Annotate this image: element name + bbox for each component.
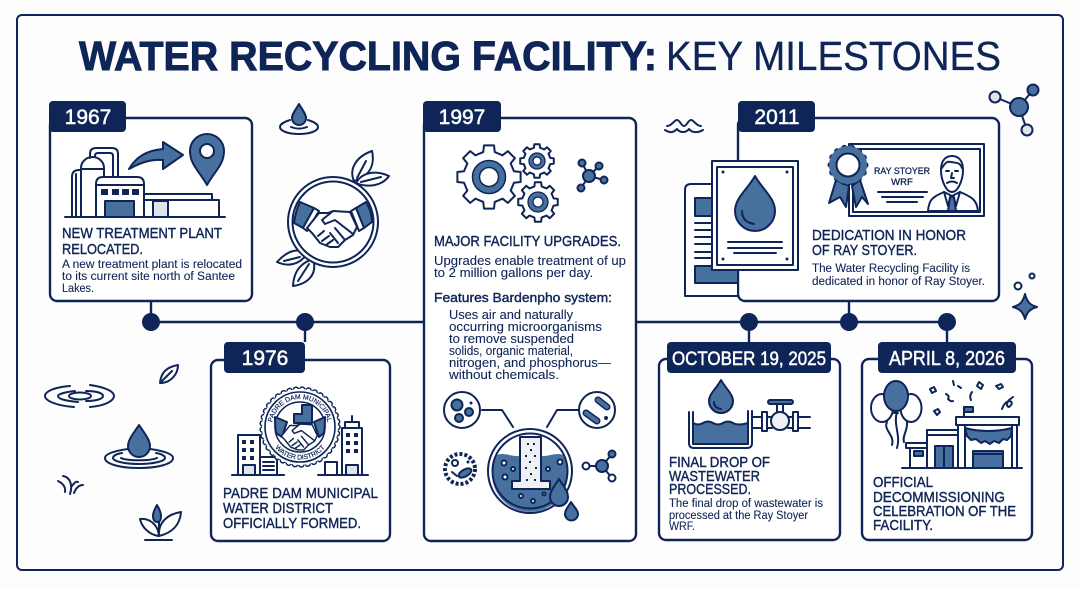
portrait <box>928 156 978 211</box>
heading October: FINAL DROP OF <box>669 454 770 471</box>
heading 2011: OF RAY STOYER. <box>812 242 917 259</box>
heading 2011 <box>812 227 966 259</box>
subheading: Bardenpho: Features Bardenpho system: <box>434 290 612 305</box>
text: capacity: to 2 million gallons per day. <box>434 265 593 280</box>
icon: ripple <box>45 385 114 407</box>
text: Bardenpho description: solids, organic material, <box>449 343 573 358</box>
year tag 2011: 2011 <box>754 106 800 129</box>
timeline <box>142 301 956 342</box>
icon: gears <box>457 144 558 222</box>
icon: drop with ripple <box>280 104 318 134</box>
panel: 1997 <box>423 101 636 541</box>
text: Bardenpho description: without chemicals. <box>448 367 559 382</box>
year tag 1997 <box>423 101 501 132</box>
panel: 2011 <box>685 101 999 301</box>
text 1967: A new treatment plant is relocated <box>62 257 242 271</box>
heading 1976: WATER DISTRICT <box>223 500 333 517</box>
heading 1997: MAJOR FACILITY UPGRADES. <box>434 233 621 250</box>
decorative icons: ripples, drop, leaves <box>45 365 181 540</box>
year tag 1976: 1976 <box>242 347 288 370</box>
icon: drops <box>550 479 578 520</box>
title: KEY MILESTONES <box>666 33 1001 79</box>
certificate text <box>874 166 930 188</box>
rosette <box>829 148 868 207</box>
certificate text: WRF <box>891 177 913 188</box>
date tag October: OCTOBER 19, 2025 <box>672 349 826 370</box>
text: capacity: Upgrades enable treatment of up <box>434 253 626 268</box>
heading 1976 <box>223 485 378 532</box>
icon: leaf <box>160 365 178 383</box>
icon: filter tank <box>488 429 572 513</box>
heading April: FACILITY. <box>873 517 933 534</box>
text October <box>669 496 823 533</box>
year tag 2011 <box>738 101 815 132</box>
panel: 1967 <box>49 101 252 301</box>
text 2011: The Water Recycling Facility is <box>812 261 970 275</box>
text: Bardenpho description: nitrogen, and phosphorus— <box>449 355 611 370</box>
icon: molecule lower <box>582 450 616 482</box>
year tag 1967: 1967 <box>65 106 111 129</box>
heading April: CELEBRATION OF THE <box>873 503 1016 520</box>
year tag 1967 <box>49 101 126 132</box>
icon: bacteria circle <box>547 392 615 428</box>
icon: certificate <box>829 144 984 216</box>
text October: processed at the Ray Stoyer <box>669 508 808 522</box>
icon: grass <box>58 476 83 494</box>
icon: molecule small <box>578 160 608 192</box>
panel: 1976 <box>210 342 392 542</box>
icon: district seal: PADRE DAM MUNICIPAL <box>268 394 332 422</box>
icon: city buildings <box>232 416 368 475</box>
text October: WRF. <box>669 519 695 533</box>
heading 1976: OFFICIALLY FORMED. <box>223 515 361 532</box>
panel: April 8, 2026 <box>862 342 1032 540</box>
text: Bardenpho description <box>448 307 611 382</box>
heading April: OFFICIAL <box>873 474 933 491</box>
heading 2011: DEDICATION IN HONOR <box>812 227 966 244</box>
text 2011 <box>812 261 985 288</box>
heading October: WASTEWATER <box>669 468 760 485</box>
icon: balloons <box>871 381 922 448</box>
icon: back document <box>685 184 738 296</box>
text October: The final drop of wastewater is <box>669 496 823 510</box>
date tag April <box>878 342 1016 373</box>
icon: falling drop <box>709 380 733 413</box>
title: WATER RECYCLING FACILITY: <box>79 33 657 79</box>
year tag 1997: 1997 <box>439 106 485 129</box>
heading 1976: PADRE DAM MUNICIPAL <box>223 485 378 502</box>
text 1967: to its current site north of Santee <box>62 269 235 283</box>
heading October: PROCESSED. <box>669 481 751 498</box>
heading 1967: RELOCATED. <box>62 241 143 258</box>
heading October <box>669 454 770 498</box>
heading April <box>873 474 1016 534</box>
icon: location pin <box>190 134 224 185</box>
text: Bardenpho description: Uses air and naturally <box>449 307 573 322</box>
text 1967 <box>62 257 242 295</box>
icon: treatment plant <box>65 148 225 217</box>
icon: facility building <box>902 407 1022 468</box>
certificate text: RAY STOYER <box>874 166 930 177</box>
year tag 1976 <box>224 342 305 373</box>
icon: solids circle <box>444 392 513 428</box>
icon: district seal: WATER DISTRICT <box>276 444 324 460</box>
text: Bardenpho description: occurring microorganisms <box>449 319 603 334</box>
text: Bardenpho description: to remove suspended <box>449 331 574 346</box>
icon: microbe <box>445 454 475 484</box>
panel: October 19, 2025 <box>659 342 840 540</box>
heading 1967: NEW TREATMENT PLANT <box>62 225 222 242</box>
heading April: DECOMMISSIONING <box>873 489 1005 506</box>
icon: confetti <box>930 381 1013 415</box>
text 2011: dedicated in honor of Ray Stoyer. <box>812 274 985 288</box>
icon: sprout <box>140 505 181 540</box>
icon: sparkles <box>1013 274 1037 319</box>
text 1967: Lakes. <box>62 281 94 295</box>
icon: molecule top right <box>990 84 1038 136</box>
icon: waves <box>665 120 703 132</box>
icon: front document with drop <box>712 161 798 270</box>
date tag April: APRIL 8, 2026 <box>889 348 1005 370</box>
heading 1967 <box>62 225 222 258</box>
title <box>79 33 1001 79</box>
icon: drop in ripple <box>105 425 173 468</box>
icon: relocation arrow <box>129 142 183 169</box>
date tag October <box>667 342 831 373</box>
text: capacity <box>434 253 626 280</box>
icon: tank and valve <box>689 400 810 448</box>
icon: handshake with leaves <box>277 151 389 286</box>
icon: district seal <box>259 386 341 468</box>
